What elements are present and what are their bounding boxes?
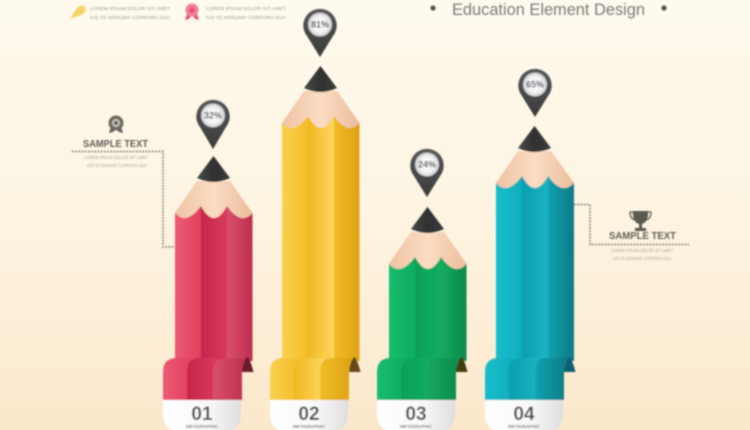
pin: 65%: 65% bbox=[526, 80, 544, 90]
pencil 02 yellow bbox=[270, 66, 360, 430]
wood tip bbox=[389, 232, 466, 269]
callout: right sample text: SAMPLE TEXT bbox=[609, 230, 677, 242]
callout: right sample text: IUS TE NONUMY CORPORA SUA bbox=[613, 256, 671, 261]
title: Education Element Design: Education Element Design bbox=[452, 0, 645, 19]
lead tip bbox=[197, 156, 230, 182]
wood tip bbox=[175, 181, 252, 218]
callout: left sample text: LOREM IPSUM DOLOR SIT AMET bbox=[84, 155, 148, 160]
cap bbox=[377, 400, 455, 430]
pencil 01 red: INFOGRAPHIC bbox=[186, 424, 219, 429]
legend item: pink ribbon: LOREM IPSUM DOLOR SIT AMET bbox=[206, 6, 286, 11]
pin: 65% bbox=[518, 69, 552, 117]
pencil 03 green bbox=[377, 207, 468, 430]
pin: 32%: 32% bbox=[204, 110, 222, 120]
fold shadow bbox=[455, 357, 468, 372]
lead tip bbox=[304, 66, 337, 92]
band bbox=[163, 358, 191, 400]
icon: trophy bbox=[630, 211, 651, 231]
callout: left sample text: IUS TE NONUMY CORPORA SUA bbox=[87, 163, 147, 168]
legend item: pink ribbon bbox=[185, 4, 287, 20]
band bbox=[377, 358, 405, 400]
legend item: yellow pencil: IUS TE NONUMY CORPORA SUA bbox=[90, 15, 171, 20]
fold shadow bbox=[348, 357, 360, 372]
fold shadow bbox=[241, 357, 254, 372]
fold shadow bbox=[563, 357, 576, 372]
pencil 04 teal: INFOGRAPHIC bbox=[508, 424, 541, 429]
icon: medal bbox=[108, 116, 124, 133]
legend item: pink ribbon: IUS TE NONUMY CORPORA SUA bbox=[206, 15, 287, 20]
band bbox=[270, 358, 298, 400]
pin: 81%: 81% bbox=[311, 20, 329, 30]
pin: 81% bbox=[303, 9, 337, 57]
cap bbox=[163, 400, 241, 430]
number: 03 bbox=[405, 404, 427, 425]
callout: right sample text bbox=[574, 204, 689, 261]
number: 04 bbox=[513, 404, 535, 425]
pin: 24%: 24% bbox=[418, 160, 436, 170]
pencil 01 red bbox=[163, 156, 254, 430]
pencil 02 yellow: INFOGRAPHIC bbox=[293, 424, 326, 429]
wood tip bbox=[496, 151, 574, 188]
legend item: yellow pencil bbox=[70, 6, 171, 20]
pin: 24% bbox=[410, 149, 444, 197]
number: 02 bbox=[298, 404, 320, 425]
cap bbox=[270, 400, 348, 430]
callout: left sample text: SAMPLE TEXT bbox=[83, 138, 149, 150]
lead tip bbox=[518, 126, 551, 152]
callout: left sample text bbox=[72, 116, 183, 247]
pencil 03 green: INFOGRAPHIC bbox=[400, 424, 433, 429]
pencil 04 teal bbox=[485, 126, 576, 430]
number: 01 bbox=[191, 404, 213, 425]
pin: 32% bbox=[196, 100, 230, 149]
callout: right sample text: LOREM IPSUM DOLOR SIT AMET bbox=[611, 248, 673, 253]
cap bbox=[485, 400, 563, 430]
wood tip bbox=[282, 91, 360, 128]
lead tip bbox=[411, 207, 444, 233]
band bbox=[485, 358, 513, 400]
legend item: yellow pencil: LOREM IPSUM DOLOR SIT AMET bbox=[90, 6, 170, 11]
